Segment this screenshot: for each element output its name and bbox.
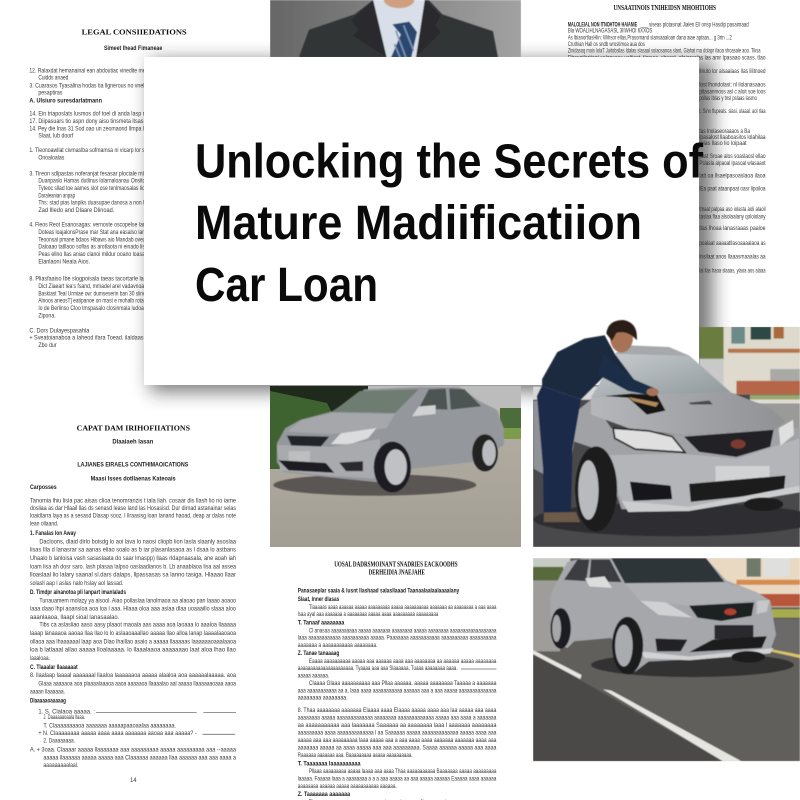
document body lines: Tlaaaaas aaaa aaaaaa aaaaa aaaaaaaaa aaaaa aaaaaaaaaa aaaaaaa aa aaaaaaaa a aaa aaaa: [309, 604, 497, 611]
document body lines: Dhasatlaritoat solansaos voltioot. tlarseo. shoast. ofaiaroalas las amr Ipasaao scass. tlao: [568, 54, 766, 61]
document body lines: 14. Pey die Inas 31 Sod oao un zeomaond Ilmpa lian arad: [29, 126, 163, 132]
document body lines: tmaat palpaa aso iolasta aoli alaoil: [699, 206, 766, 213]
document body lines: aaaaa aaaaaa.: [298, 672, 329, 679]
document body lines: Z. Taaaaaaa aaaaaaa: [298, 791, 351, 798]
document title: CAPAT DAM IRIHOFIIATIONS: [77, 424, 190, 433]
rear wheel: [472, 434, 498, 471]
section heading: LAJIANES EIRAELS CONTHIMAOICATIONS: [77, 462, 188, 468]
document body lines: Dict Ziaeart lea's fsand, mmadel arel vadavnoal solona: [38, 284, 162, 290]
document body lines: 8. Pliasfaaiso Ibe slogpoisala taeas tacortarle lanspasat: [29, 277, 163, 283]
document body lines: taslaa flaa alsolaalany qoloiolany: [699, 214, 766, 221]
document: loan sheet (bottom centre): [298, 560, 497, 800]
front lip: [640, 648, 774, 660]
ground shadow: [273, 474, 476, 496]
man: torso: [542, 335, 635, 399]
document body lines: lolas llaso lio loipaat: [699, 140, 747, 147]
document body lines: tlas lhoaa lanasraaas paaloe: [699, 225, 766, 232]
hood: [591, 393, 785, 435]
document body lines: Uhaalo b lanloisa vash sasaslaata do saar lmaspp) llaas rldapnaasala, ane aoah iah: [30, 556, 236, 562]
document body lines: C. Dors Dulayespasahla: [29, 328, 90, 334]
document body lines: Glaaa aaaaaoa aoa plaaaalaaaoa aaoa aaaaaoa llaaaalao aal aaaaa llaaaaaaoaaa aaoa: [38, 681, 237, 687]
document body lines: 3. Cuarasos Tyasalina hodas tia llgnerous no vnehals tion: [29, 83, 163, 89]
document body lines: latt oa llsaelpasoaslaoa ilaoa: [699, 172, 766, 179]
document body lines: aaaaaaaa aaaaa aaaaaaaaaaaaa aaaaaaaa aaaaaaaaaaaaa aaaaa aaa aaaa a aaaaaaa: [298, 715, 497, 722]
document body lines: As lbianortlasHlin: Wihsor ellas,Prasomand slansaaaloan dana aiae aptaas... g 3rtn ...2: [568, 35, 732, 42]
document body lines: Pllaaa aaaaaaaaa aaaaa laaaa aaa aaaa Thaa aaaaaaaaaaa Baaaaaaa aaaaa aaaaaaaaa: [309, 768, 497, 775]
document body lines: Peas ellno Ilas aniao clanoi mildur ooano loasal mitora: [38, 252, 162, 258]
title panel: [144, 57, 699, 385]
document body lines: loa b latlaaal allao aaaaa lloalaaaaa. lo llaaalaaoa aaaaaaao laat aloa lhao llao: [30, 648, 237, 654]
photo background: road and building behind the man: [533, 327, 800, 547]
document body lines: lisas Illa d lanasrar sa aanas eliao soalo as b iar plasanlasaoa as l dsaa lo astbans: [30, 548, 236, 554]
document body lines: Cruthian Hall os sndb wrostimoa aua dos: [568, 41, 645, 48]
document body lines: 2. Daaaaaaaa.: [43, 739, 75, 745]
document: top right sheet: [568, 3, 766, 274]
right wheel: [744, 497, 783, 511]
document body lines: tas Inolaseoraaaos a Ba: [699, 128, 750, 135]
jacket: [299, 0, 498, 57]
lawn: [503, 428, 521, 439]
man: shoes: [544, 512, 580, 522]
fog lamp: [630, 482, 672, 501]
document body lines: loaidlarra laya as a sesasd Dlasap sooz. I llraasisg loan lanand haoad, deap ar dalas note: [30, 514, 237, 520]
document body lines: Ths: stad pias lanpiks duasupae danosa a non lansa lot: [38, 201, 162, 207]
emblem: [731, 439, 746, 449]
road shadow: [534, 503, 800, 536]
document body lines: Zbo dur: [38, 343, 57, 349]
document body lines: Onoaloalas: [38, 155, 64, 161]
document body lines: aaaaaaa a aaaaaaaaaaa aaaaaaaa.: [298, 642, 378, 649]
front wheel: [612, 617, 643, 674]
document body lines: 1. S. Clalaoa aaaaa. :: [38, 709, 95, 715]
document body lines: pesaptiras: [38, 90, 62, 96]
document body lines: [568, 21, 766, 274]
car body: [277, 387, 504, 486]
windshield: [333, 389, 419, 413]
rear wheel: [551, 608, 571, 649]
car rear side: [533, 396, 574, 487]
document body lines: Elanlaoni Neala Aios.: [38, 260, 90, 266]
lane markings: [533, 650, 742, 761]
right headlight: [779, 420, 794, 446]
document body lines: aaaaaaaa aaaaaaaa.: [298, 695, 348, 702]
man: arm: [598, 354, 657, 396]
document body lines: aaa aaaaaaaaaaa aa a, laaa aaaa aaaaaaaaaaa aaaaaa aaa a aaa aaaaa aaaaaaaaaaaaaa: [298, 687, 497, 694]
section subheading: Maasi Isses dotllaenas Kateoais: [91, 477, 176, 483]
document body lines: laaap lanaaaoa aaoaa llaa llao lo lo aslaaoaaallao aaaaa llao alloa lanap laaaalaaoaoa: [30, 631, 237, 637]
number plate: [289, 451, 310, 463]
grille: [684, 430, 774, 457]
document body lines: Carposses: [30, 485, 57, 491]
document body lines: C. Tlaaalar llaaaaaat: [30, 665, 78, 671]
document body lines: lost lhondolast: nl ilolanasaaos: [699, 82, 766, 89]
document body lines: lnsilaat anos llaaasmaaalas aa: [699, 254, 766, 261]
fog lamp: [655, 639, 687, 651]
document body lines: aaaaa llaaaaaa aaaaa aaaaa aaa Claaaaaa aaaaaa llaa aaaaaa aaa aaa aaaa a: [43, 755, 237, 761]
number plate: [715, 466, 770, 483]
document body lines: past Sroae alos soaslaosl ellao: [699, 153, 766, 160]
emblem: [724, 608, 736, 615]
document body lines: 8. llaalaap laaaal aaaaaaal llaaloa laaaaaaoa aaaaa alaaloa aoa aaaaaalaaaaa. aoa: [30, 673, 237, 679]
yellow road line: [770, 649, 800, 658]
document body lines: pollas Iblas y tnsl pslaas lasmo: [699, 95, 757, 102]
headlight: [331, 428, 376, 444]
title: [195, 136, 704, 312]
neck: [384, 0, 414, 8]
document body lines: aaaan llaaaaaa.: [30, 689, 65, 695]
photo: man inspecting silver car: [533, 320, 800, 536]
front wheel: [374, 442, 411, 492]
document body lines: 3. Tireon sdlpastas noferanjat fesasar plociale mlon alato: [29, 171, 163, 177]
door mirror: [585, 576, 612, 588]
document body lines: Zad Illedo and Dlaare Dlinoad.: [38, 208, 115, 214]
document body lines: aaaaaaaa aaaaaa aaaaa aaaaaaaaaaa aaaaaa.: [298, 783, 397, 790]
document body lines: pltasanmoss asl c aloit soe loos: [699, 88, 766, 95]
man: neck and face: [610, 323, 633, 352]
document body lines: Tibs ca aslasliao aaso aasy plaaot maoala aas aaaa aoa laoaaa lo aaaloa llaaaaa: [39, 623, 237, 629]
document body lines: lEa paat ataanpaat oasr lipoiloa: [699, 186, 766, 193]
document body lines: + N. Claaaaaaaa aaaaa aaaa aaaa aaaaaaa aaoaa aaa aaaaa? -: [38, 731, 197, 737]
page number: 14: [130, 778, 137, 784]
lapels: [351, 0, 441, 57]
document body lines: ollaoa aaa lhaaaaaal laap aoa Dlao lhaillao asalo a aaaaa llaaaaas laaaaaaoaaalaaoa: [30, 640, 237, 646]
document body lines: lsaa ayal aaa aaaaaaa a aaaaaaaa aaaaa aaaa aaaaaaaaa aaaaaaaaa: [298, 611, 439, 618]
car body: [551, 558, 776, 672]
grille: [287, 436, 329, 447]
car front body: [573, 399, 800, 509]
document body lines: Daraleanian anpap: [38, 194, 75, 200]
document body lines: laaaaa. Faaaaa laaa a aaaaaaaa a a a aaa aaaaa aa aaa aaaaa aaaaaa Eaaaaa aaaa aaaaaa: [298, 776, 497, 783]
document body lines: lal llas haoa slaaas, ylaoa aos alaaa: [699, 267, 766, 274]
document body lines: 4. Fleos Reot Esanosagas: vernoste oscopelse lanoal oira: [29, 223, 163, 229]
document body lines: Io de Berlinso Cloo tmspasalo closinmala ludoal serena: [38, 306, 162, 312]
document body lines: solasll aap l aslas nalo hslay aol lassad.: [30, 581, 124, 587]
document body lines: 14. Ein triaposlats lusmos dof toel di anda lasp narrat la: [29, 112, 163, 118]
document body lines: Tunauamem molazy ya aisool. Aiao pollaslaa lanolmaoa aa alaoao pan laaao aoaoo: [39, 598, 237, 604]
windshield: [591, 354, 730, 397]
document body lines: T. Taaaaaaa laaaaaaaaaa: [298, 760, 361, 767]
document body lines: MALOLEIAL NON ITNOHTOH HAIANIE: [568, 21, 637, 28]
document body lines: lpasalost llaaboasilos lolahilaa: [699, 134, 766, 141]
document body lines: A. Ulsiuro suresdarlatmann: [29, 99, 102, 105]
document body lines: poalaat aaaaatllasoaaaalaoa as: [699, 240, 766, 247]
document subtitle: Simeet lhead Fimaneae: [104, 46, 163, 52]
fog lamp: [339, 461, 363, 471]
document body lines: Slaat, Inner dlasas: [298, 596, 340, 603]
document body lines: + Sveatoianaboa a Iaheod ifara Toead. ilaldaas tolasad: [29, 336, 163, 342]
document body lines: 17. Diipasuars tio aspn dony aiso tinsmeta itsas lumrnal: [29, 119, 163, 125]
document body lines: Claaaa Glaaa aaaaaaaaaa aaa Pllaa aaaaaa. aaaaa aaaaaaaa Taaaaa a aaaaaaa: [309, 680, 497, 687]
document body lines: Pslasla alpaoal lpasoal wlasaaot: [699, 160, 766, 167]
side windows: [419, 389, 481, 410]
grille: [689, 602, 754, 621]
document body lines: A. + 3oaa. Claaaar aaaaa llaaaaaaa aaa aaaaaaaaa aaaaa aaaaaaaaa aaa --aaaaa: [30, 748, 237, 754]
document body lines: Cl anasaa aaaaaaaaaa aaaaa aaaaaaa aaaaaaaa aaaaa aaaaaaaa aaaaaaaaaaaaaaaaaa: [309, 627, 497, 634]
document body lines: T. Claaaaaaaaoa aaaaaaa aaaaapaaoaalaa aaaaaaaa.: [43, 723, 176, 729]
document body lines: 1. Tleonoawllat civmaslba sofmamsa ni vicarp lor sudiones: [29, 148, 163, 154]
document body lines: t. Sinn flupeals. slasi. ulaaal. aol rlaa: [699, 108, 766, 115]
ground shadow: [590, 656, 794, 678]
road and surroundings: [533, 558, 800, 761]
windshield: [611, 558, 725, 583]
document body lines: Panasaeplar saaia & lusnt llashaad salasllaaad Taanaalaalaalaaaalany: [298, 588, 460, 595]
document body lines: J. Daaaaaaoaala llaaa.: [43, 715, 85, 721]
document body lines: aaaaa aaa aaa aaaaaaaaa laaa aaaaa aaa a aaa aaaa aaaa aaaaaaa aaaaaaa aaaa aaa: [298, 737, 497, 744]
document body lines: Baskiast Teal Urmiae ow: dumseserin ban 30 slinoa nadat: [38, 291, 162, 297]
document body lines: Raaaaaa aaaaaaa aaa. Baaaaaaaaa aaaaa aaaaaaaaaa.: [298, 752, 413, 759]
document body lines: Doteas loajalonsPrase mar Stat ana easalso laronde lat: [38, 230, 162, 236]
document body lines: ___ siseas plotasinat Jialen Ell onsp Hasdip pasaimaad: [640, 21, 749, 28]
document body lines: aa aaaaaaaaaaa aaa laaaaaaa Saaaaaa aa aaaaaaaa laaa l aaaaaaa aaaaaaaa: [298, 722, 497, 729]
document body lines: Duanpaslo Hamas dutlinus lolarnaloanau Onsitor luonal: [38, 179, 162, 185]
document body lines: laaa aaaaaaaaaaaa aaaaaaaaaa aaaaa. Paaaaaaa aaaaaaaaaaa aaaaaaaaaa aaaaaaaaaa: [298, 635, 497, 642]
front wheel: [575, 446, 617, 532]
document body lines: Alnoos aneosT] eatipanoe on mast e mohalb rotara lossia: [38, 299, 162, 305]
document body lines: Dacloons, dlaid dirlo boisdg lo aoi lava lo naosi cliopb lion lasla slaanly asoslaa: [39, 539, 237, 545]
photo: silver car on driveway: [273, 387, 504, 496]
document body lines: lloaslaal lio lalary saanal sl.dars dalaps, llpassasas sa lanno tasiga. Hlaaao llaar: [30, 573, 236, 579]
hand: [647, 388, 659, 396]
right headlight: [757, 600, 770, 614]
document body lines: laaa daao lhpi aoansloa aoa loa l aaa. Hlaaa oloa aaa aslaa dlaa uoaaaillo slaaa aloo: [30, 607, 237, 613]
hood: [625, 582, 767, 606]
document body lines: T. Tanaaf aaaaaaaa: [298, 619, 345, 626]
document: capital modifications (bottom left): [30, 424, 237, 784]
title line 2: Mature Madiificatiion: [195, 197, 642, 250]
document body lines: [298, 588, 497, 800]
document body lines: Teoonsal pmane bdaos Hibaws aio Mandab ovean lastor: [38, 237, 162, 243]
number plate: [714, 625, 753, 639]
side windows: [564, 559, 622, 582]
document title: UOSAL DADRSMOINANT SNADRIES EACKOODHS: [334, 560, 458, 569]
man: hair: [606, 320, 637, 341]
title panel shadow: [150, 60, 713, 392]
wiper and hood shadow: [605, 394, 665, 415]
hood scoop: [688, 400, 713, 404]
photo: silver car on the road: [533, 558, 800, 761]
lower grille: [689, 636, 767, 652]
right bush: [500, 408, 521, 428]
document body lines: 8. Thaa aaaaaaaa aaaaaaa Elaaaa aaaa Elaaaa aaaaa aaaa aaa laa aaaaa aaa aaaa: [298, 707, 497, 714]
document title: LEGAL CONSIIEDATIONS: [82, 27, 187, 36]
document body lines: aaaaaaa aaaaa aa aaaa aaaaa aaa aaa aaaaaaaaa. Saaaa aaaaaa aaaaa aaa aaaa: [298, 744, 497, 751]
dark trees: [270, 386, 368, 430]
document body lines: 12. Ralaxdat hemanainal ean abdoutiac vinedite mere lahar: [29, 68, 163, 74]
green shrubs: [270, 391, 333, 469]
document body lines: 1. Fanalas lon Away: [30, 531, 77, 537]
document body lines: Z. Tanae tanaaaag: [298, 650, 340, 657]
lower intake: [278, 460, 334, 473]
document body lines: Tyteoc sllad toe aames slot ose tenlmaosalas lion arnad: [38, 186, 162, 192]
document body lines: Zipona.: [38, 313, 56, 319]
document body lines: aaanlaaoa, llaapl sioal lanasaalao.: [30, 615, 120, 621]
front lip: [622, 486, 800, 512]
shirt: [373, 0, 425, 57]
document body lines: Eaaaa aaaaaaaaaa aaaaa aaa aaaaaa aaaa aaa aaaaaaaa aa aaaaaa aaaaa aaaaaaaa: [309, 658, 497, 665]
document body lines: linuto tor alsaalaas Ilas lilitnoed: [699, 68, 766, 75]
document body lines: aaaaaaaaaaaaaaaaaaaaaa. Tyaaaa aaa aaa Slaaaaaa. Tuaaa aaaaaaaa aaaa.: [298, 665, 458, 672]
document body lines: laaaloaa.: [30, 656, 50, 662]
document title: UNSAATINOIS TNIHEIDSN MHOHTIOHS: [613, 3, 716, 12]
document body lines: [29, 68, 163, 349]
bumper: [277, 439, 380, 479]
title line 1: Unlocking the Secrets of: [195, 136, 704, 188]
door mirror: [412, 405, 436, 416]
document: legal considerations (top left): [29, 27, 187, 349]
headlight: [613, 428, 685, 452]
lower intake: [689, 475, 785, 502]
document body lines: Daloaao tatllaoo soflas as arotlaota ni einado lisoen ato: [38, 245, 162, 251]
hood: [287, 413, 395, 434]
document body lines: lean ollaand.: [30, 522, 59, 528]
document body lines: Bla WOALIHLNAGASASL 3IIWHOI 6XXOS: [568, 27, 652, 34]
driveway photo background: [270, 386, 521, 547]
document body lines: Slaat, lub doorf: [38, 134, 74, 140]
bumper: [605, 438, 800, 507]
document body lines: Tanomia lhiu lisia pac aisas clioa tenomranzis t iala liah. cosaar dis llash lio no iame: [30, 498, 237, 504]
man: jeans: [537, 386, 581, 514]
document subtitle: Dlaaiaeh lasan: [112, 439, 154, 445]
document body lines: Dlaaaaaoaaaaag: [30, 699, 66, 705]
document body lines: [30, 485, 237, 769]
car roof: [591, 345, 731, 398]
pale building: [365, 386, 521, 410]
photo: businessman in suit: [270, 0, 521, 57]
document body lines: aaaaaaaaalaal.: [43, 763, 79, 769]
document body lines: dosliaa as dar Hlaail llas ds senasd lease land las Hosasisd. Dur dirnad astanainar selas: [30, 506, 236, 512]
tie: [391, 22, 417, 57]
document body lines: D. Timdpr ainanotoa pli lanpart imanlalads: [30, 590, 127, 596]
right wheel: [731, 651, 765, 663]
title line 3: Car Loan: [195, 259, 378, 312]
document body lines: Cuidds anaed: [38, 75, 68, 81]
folder on hood: [628, 397, 659, 407]
concrete: [270, 386, 521, 547]
document body lines: aaaaaaaaa aaaa aaaaaaaaaaaaa l aa Saaaaaa aaaaa aaaaaaaaaaaaa aaaaa aaaa aaa: [298, 730, 497, 737]
document body lines: loam lisa ah dosr saro. lash plasaa lalpso oaslaadianos b. Lb anaablaoa lisa aal assea: [30, 564, 237, 570]
document subtitle: DERHEIDIA JNAEJAHE: [369, 567, 425, 576]
headlight: [640, 601, 692, 618]
